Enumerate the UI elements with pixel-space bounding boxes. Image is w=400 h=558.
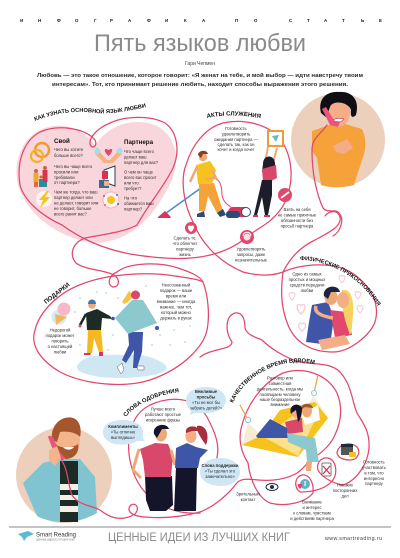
hair <box>52 417 81 442</box>
illustration: man <box>133 425 175 511</box>
label: no distractions: посторонних <box>333 488 358 493</box>
illustration: skater woman <box>115 290 159 374</box>
label: attention and interest: и действиям партнера <box>290 516 334 521</box>
circle outline <box>282 265 376 352</box>
bubble: polite requests: забрать детей?» <box>190 406 223 410</box>
column title: own: Свой <box>54 138 70 145</box>
connecting line with loops: gifts through quality time <box>200 313 369 505</box>
questions: own: от партнера? <box>54 180 80 185</box>
bubble: words of support: замечательно» <box>205 474 235 479</box>
panel: quality time <box>200 358 387 521</box>
label: no distractions: дел <box>341 494 349 498</box>
questions: own: Чего вы хотите <box>54 147 84 152</box>
decorative woman: circle portrait with phone <box>291 92 385 236</box>
footer logo <box>18 531 76 542</box>
icon: megaphone <box>99 166 115 188</box>
text: unexpected gift: Неосознанный <box>162 282 191 288</box>
smile <box>63 447 74 450</box>
questions: own <box>54 147 99 216</box>
label: willingness: интересно <box>364 476 385 481</box>
circle outline <box>200 371 341 512</box>
connecting line: heart to gifts panel <box>72 225 203 287</box>
questions: own: не говорит, больше <box>54 206 92 211</box>
connecting line: service panel to touch panel <box>193 212 340 275</box>
text: inexpensive gift: говорить <box>51 338 69 344</box>
questions: partner: Что чаще всего <box>124 149 155 154</box>
bubble: polite requests: Вежливые <box>195 389 218 394</box>
text: chores: не самые приятные <box>278 212 317 218</box>
text: простых и мощных <box>289 277 326 282</box>
text: readiness: хочет и когда хочет <box>217 147 255 152</box>
icon: ice cream <box>52 302 70 325</box>
heading: КАЧЕСТВЕННОЕ ВРЕМЯ ВДВОЕМ <box>230 358 315 403</box>
bubble: polite requests <box>186 387 226 415</box>
questions: partner: На что <box>124 196 138 200</box>
icon: rings <box>31 143 49 162</box>
footer slogan: ЦЕННЫЕ ИДЕИ ИЗ ЛУЧШИХ КНИГ <box>108 532 291 544</box>
icon: crossed phone <box>322 463 331 476</box>
questions: partner: всего вас просит <box>124 175 157 180</box>
mouth <box>333 118 344 122</box>
text: make life easier: Сделать то, <box>174 236 196 240</box>
questions: own: не делает, говорит или <box>54 200 99 206</box>
icon: eye <box>266 484 278 490</box>
questions: own: просили или <box>54 170 79 174</box>
text: деятельность, когда мы <box>257 386 303 392</box>
questions: own: партнер делает или <box>54 195 93 200</box>
phone cord <box>312 125 342 236</box>
beard <box>56 444 78 459</box>
sweater <box>312 124 365 187</box>
text: unexpected gift: который можно <box>161 310 192 315</box>
questions: partner: или что <box>124 180 139 186</box>
bubble: compliments: выглядишь» <box>111 435 136 440</box>
heading: ФИЗИЧЕСКИЕ ПРИКОСНОВЕНИЯ <box>300 256 381 306</box>
text: requests: Удовлетворять <box>237 246 266 252</box>
text: unexpected gift: подарок — ваше <box>160 288 193 293</box>
intro text <box>37 72 363 88</box>
hair <box>320 92 357 118</box>
brand name: Smart Reading <box>36 532 76 538</box>
background circle <box>16 427 112 523</box>
text: Одно из самых <box>292 272 323 276</box>
text: работают простые <box>145 412 182 417</box>
connecting line: heart to service panel <box>62 218 273 258</box>
header label: ПО <box>235 18 258 23</box>
questions: own: требовали <box>54 175 75 180</box>
label: willingness: Готовность <box>363 460 386 464</box>
panel: how to find your love language <box>16 103 178 243</box>
text: readiness: сделать так, как он <box>218 142 255 147</box>
text: inexpensive gift: Недорогой <box>50 328 71 332</box>
text: chores: просьб партнера <box>281 224 314 228</box>
questions: partner: О чем он чаще <box>124 170 154 174</box>
header label: ИНФОГРАФИКА <box>20 18 206 23</box>
icon: gloves <box>278 188 292 202</box>
illustration: skater man <box>78 300 115 356</box>
head <box>54 426 80 456</box>
heart fill <box>16 122 176 243</box>
label: attention and interest: Внимание <box>302 500 322 504</box>
panel: words of affirmation <box>103 387 240 514</box>
text: inexpensive gift: подарок может <box>46 333 75 338</box>
bubble: compliments <box>103 420 145 445</box>
text: inexpensive gift: любви <box>54 350 67 354</box>
t-shirt stripes <box>60 484 78 512</box>
text: Разговор или <box>267 376 294 380</box>
icon: heart badge <box>185 222 197 234</box>
heading: АКТЫ СЛУЖЕНИЯ <box>207 111 261 118</box>
label: no distractions: Никаких <box>337 482 354 488</box>
column title: partner: Партнера <box>124 139 154 146</box>
bubble: compliments: «Ты отлично <box>111 430 136 434</box>
text: искренние фразы <box>146 418 180 422</box>
text: readiness: удовлетворить <box>222 132 251 136</box>
questions: own: Чего вы чаще всего <box>54 164 93 169</box>
bubble: words of support: Слова поддержки <box>201 463 239 468</box>
bubble: polite requests: просьбы <box>197 394 216 400</box>
text: inexpensive gift: о настоящей <box>48 344 73 349</box>
text: requests: запросы, даже <box>237 252 266 257</box>
bubble: words of support: «Ты сделал это <box>205 468 236 474</box>
phone cord <box>62 461 200 518</box>
snow dots <box>74 285 191 351</box>
text: readiness: Готовность <box>225 126 248 131</box>
circle outline <box>34 274 208 384</box>
icon: attention badge <box>298 479 310 489</box>
text: unexpected gift: внимание — иногда <box>157 299 196 304</box>
illustration: ice <box>77 354 167 378</box>
illustration: woman hanging a picture <box>253 131 283 217</box>
illustration: embracing couple <box>306 287 353 350</box>
text: chores: Взять на себя <box>284 207 310 212</box>
phone <box>48 436 65 461</box>
icon: face <box>240 230 254 244</box>
text: unexpected gift: важнее, чем тот, <box>160 304 192 310</box>
phone <box>322 107 340 127</box>
circle outline <box>129 399 218 513</box>
label: willingness: в том, что <box>364 470 384 476</box>
hand on chest <box>333 139 353 154</box>
panel: acts of service <box>158 111 317 262</box>
icon: family <box>34 166 48 187</box>
illustration: man with vacuum cleaner <box>158 151 250 218</box>
heading: ПОДАРКИ <box>44 282 70 304</box>
label: attention and interest: к словам, чувствам <box>293 510 331 516</box>
brand tagline: ЦЕННЫЕ ИДЕИ ИЗ ЛУЧШИХ КНИГ <box>36 538 76 542</box>
circle outline <box>183 121 291 222</box>
icon: hands with heart <box>94 147 123 163</box>
t-shirt <box>60 461 78 522</box>
illustration: woman <box>174 426 208 511</box>
shirt <box>23 459 97 522</box>
hand <box>49 446 61 466</box>
label: willingness: участвовать <box>362 465 387 470</box>
footer rule <box>9 526 391 528</box>
heading: СЛОВА ОДОБРЕНИЯ <box>124 388 179 416</box>
questions: own: больше всего? <box>54 153 83 158</box>
questions: partner: делает ваш <box>124 154 147 160</box>
head <box>326 97 350 127</box>
label: willingness: партнеру <box>365 481 384 486</box>
bubble: compliments: Комплименты <box>108 424 138 429</box>
text: средств передачи <box>290 282 325 288</box>
questions: partner: обижается ваш <box>124 201 154 206</box>
label: eye contact: контакт <box>241 497 255 502</box>
icon: cinema clapper with loop <box>337 444 359 460</box>
heading: КАК УЗНАТЬ ОСНОВНОЙ ЯЗЫК ЛЮБВИ <box>34 103 146 121</box>
label: attention and interest: и интерес <box>302 505 322 510</box>
text: make life easier: партнеру <box>176 246 195 252</box>
text: совместная <box>269 381 291 386</box>
panel: gifts <box>33 273 210 386</box>
bubble: polite requests: «Ты не мог бы <box>192 400 220 405</box>
text: unexpected gift: держать в руках <box>160 316 193 320</box>
text: наше безраздельное <box>260 397 301 402</box>
bubble: words of support <box>200 458 240 486</box>
intro text: Любовь — это такое отношение, которое говорит: «Я женат на тебе, и мой выбор — идти навстречу твоим <box>37 72 363 79</box>
footer url: www.smartreading.ru <box>325 536 382 542</box>
questions: own: всего ранит вас? <box>54 212 88 216</box>
text: readiness: ожидания партнера — <box>214 137 259 142</box>
panel: physical touch <box>281 256 381 353</box>
label: eye contact: Зрительный <box>236 492 260 496</box>
text: unexpected gift: время или <box>166 294 187 298</box>
illustration: hammock <box>240 375 328 471</box>
heart outline <box>19 117 177 225</box>
header label <box>20 18 382 23</box>
text: make life easier: жизнь <box>179 252 192 257</box>
intro text: интересам». Тот, кто принимает решение любить, находит способы выражения этого решения. <box>52 81 348 88</box>
questions: partner: партнер для вас? <box>124 160 159 165</box>
text: любви <box>301 288 314 293</box>
man: circle portrait with phone <box>16 417 200 523</box>
icon: emotions circle <box>103 192 119 208</box>
decorative hearts <box>289 276 363 332</box>
text: make life easier: что облегчит <box>173 241 197 246</box>
text: внимание <box>270 402 290 407</box>
text: посвящаем человеку <box>260 392 301 397</box>
background circle <box>291 93 385 187</box>
icon: lightning <box>36 191 52 208</box>
questions: own: Чем же тогда, что ваш <box>54 190 98 194</box>
questions: partner <box>124 149 159 212</box>
title: Пять языков любви <box>94 30 306 57</box>
author: Гари Чепмен <box>185 61 215 67</box>
text: Лучше всего <box>151 406 176 412</box>
icon: logo <box>18 531 34 541</box>
text: chores: обязанности без <box>281 218 313 223</box>
text: requests: незначительные <box>235 258 268 262</box>
header label: СТАТЬЕ <box>289 18 382 23</box>
questions: partner: партнер? <box>124 206 143 212</box>
questions: partner: требует? <box>124 186 142 191</box>
